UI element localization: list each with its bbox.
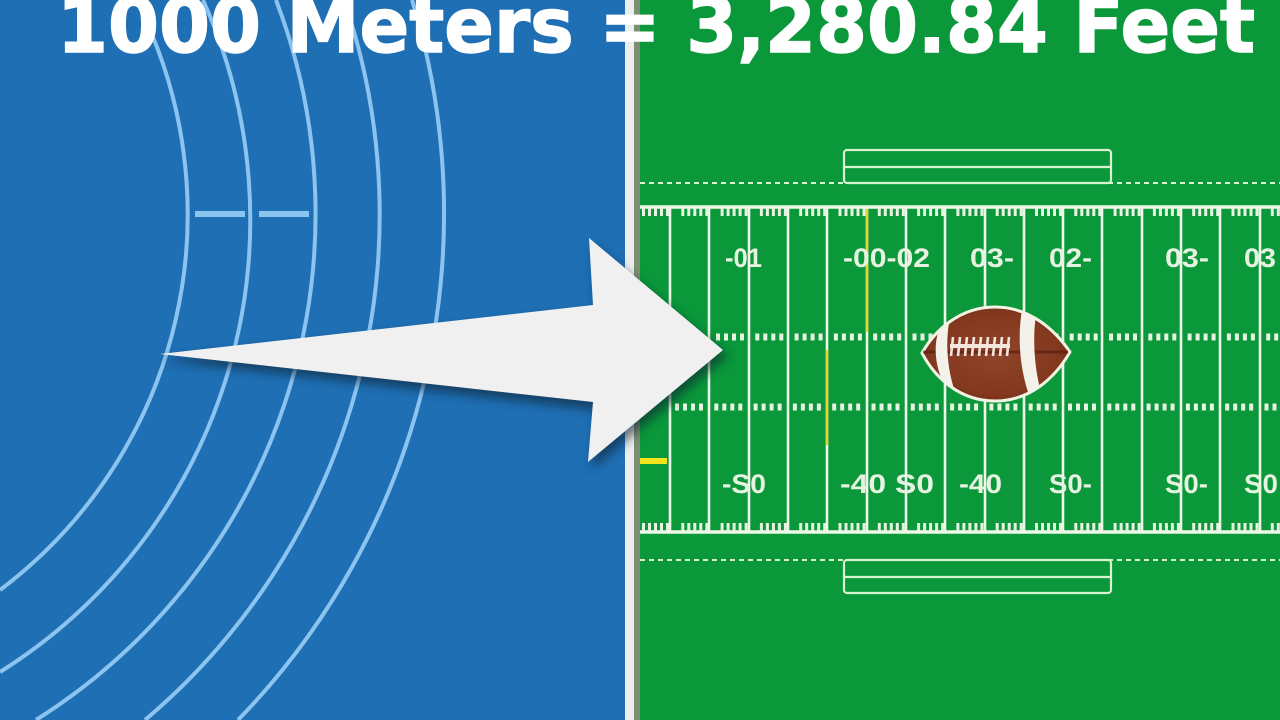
yard numbers top row: 03-	[1165, 243, 1209, 273]
yard numbers top row: 03	[1244, 243, 1276, 273]
lane markers	[195, 211, 309, 217]
end zone box bottom	[844, 560, 1111, 593]
yard numbers top row: 02-	[1049, 243, 1092, 273]
panel: football field (green)	[634, 0, 1280, 720]
yard numbers top row: 03-	[970, 243, 1014, 273]
yard lines	[670, 207, 1260, 532]
yard numbers top row: -00-02	[843, 243, 930, 273]
yard numbers bottom row: -40 S0	[840, 469, 934, 499]
arrow	[160, 238, 728, 469]
arrow shadow	[160, 245, 728, 469]
laces	[950, 337, 1010, 356]
yard numbers top row	[725, 243, 1276, 273]
panel: running track (blue)	[0, 0, 630, 720]
icon: football	[922, 305, 1070, 401]
yard numbers bottom row: S0-	[1049, 469, 1092, 499]
yard numbers bottom row: -40	[959, 469, 1002, 499]
hash marks	[642, 212, 1280, 527]
dashed boundaries	[640, 183, 1280, 560]
end zone box top	[844, 150, 1111, 183]
yard numbers top row: -01	[725, 243, 762, 273]
yard numbers bottom row: -S0	[722, 469, 766, 499]
yard numbers bottom row: S0-	[1165, 469, 1208, 499]
yard numbers bottom row	[722, 469, 1278, 499]
yard numbers bottom row: S0	[1244, 469, 1278, 499]
divider	[625, 0, 640, 720]
track lanes	[0, 0, 444, 720]
yellow marks	[640, 209, 867, 461]
sidelines	[640, 207, 1280, 532]
